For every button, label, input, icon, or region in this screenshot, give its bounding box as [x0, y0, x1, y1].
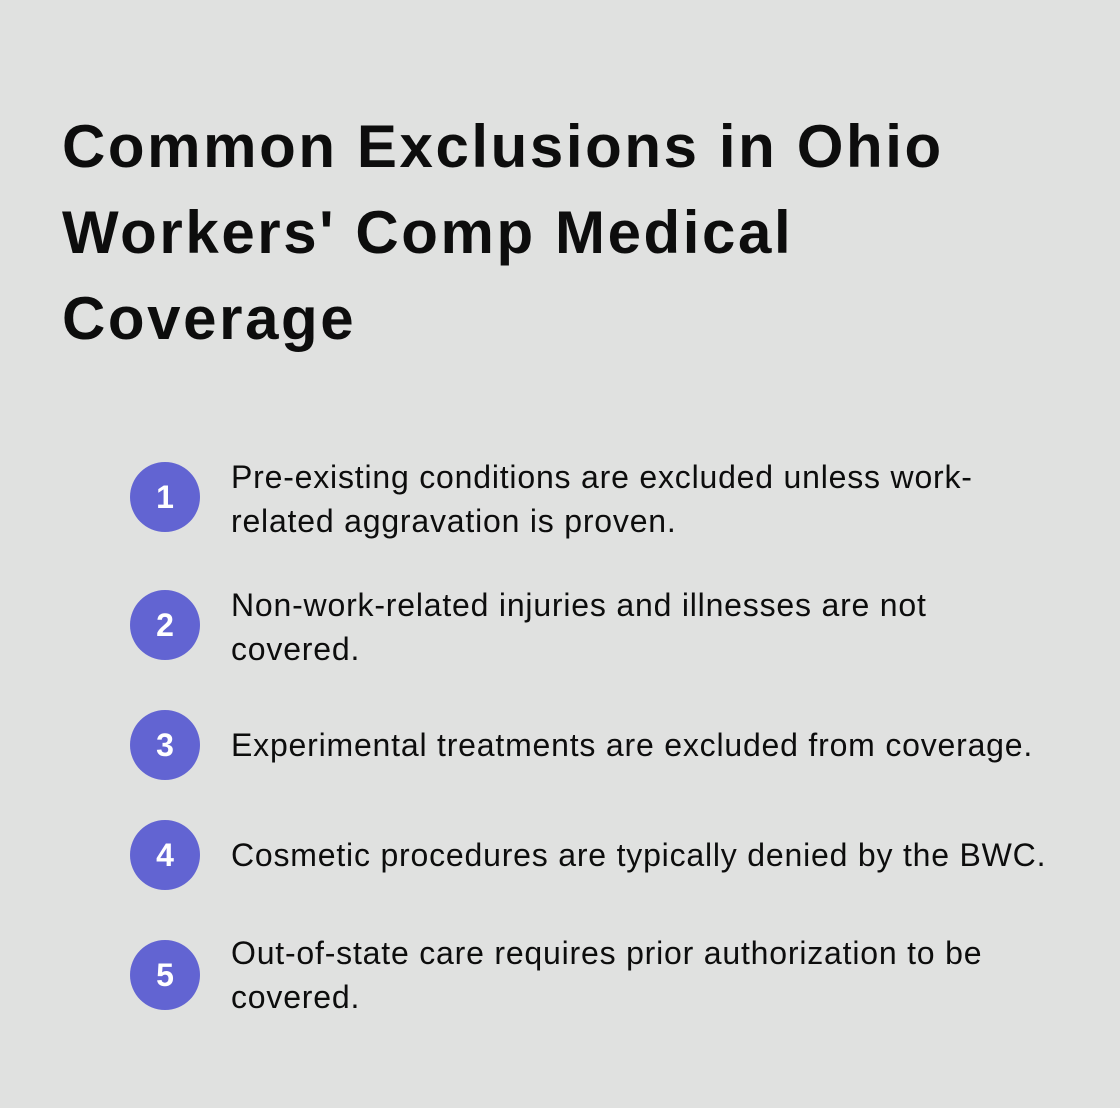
icon: number 5 — [130, 940, 200, 1010]
icon: number 3 — [130, 710, 200, 780]
icon: number 4 — [130, 820, 200, 890]
text 2: Non-work-related injuries and illnesses are not — [231, 587, 927, 623]
icon: number 2: 2 — [156, 607, 174, 643]
item 5 — [130, 935, 982, 1015]
text 5: Out-of-state care requires prior authorization to be — [231, 935, 982, 971]
text 5: covered. — [231, 979, 360, 1015]
item 3 — [130, 710, 1033, 780]
item 4 — [130, 820, 1046, 890]
title: Coverage — [62, 285, 356, 352]
icon: number 2 — [130, 590, 200, 660]
icon: number 5: 5 — [156, 957, 174, 993]
text 2 — [231, 587, 927, 667]
text 2: covered. — [231, 631, 360, 667]
icon: number 1 — [130, 462, 200, 532]
title — [62, 113, 944, 352]
item 2 — [130, 587, 927, 667]
text 1: Pre-existing conditions are excluded unless work- — [231, 459, 973, 495]
title: Common Exclusions in Ohio — [62, 113, 944, 180]
text 3: Experimental treatments are excluded from coverage. — [231, 727, 1033, 763]
text 1 — [231, 459, 973, 539]
icon: number 1: 1 — [156, 479, 174, 515]
icon: number 4: 4 — [156, 837, 174, 873]
item 1 — [130, 459, 973, 539]
text 1: related aggravation is proven. — [231, 503, 677, 539]
icon: number 3: 3 — [156, 727, 174, 763]
title: Workers' Comp Medical — [62, 199, 793, 266]
text 5 — [231, 935, 982, 1015]
text 4: Cosmetic procedures are typically denied by the BWC. — [231, 837, 1046, 873]
